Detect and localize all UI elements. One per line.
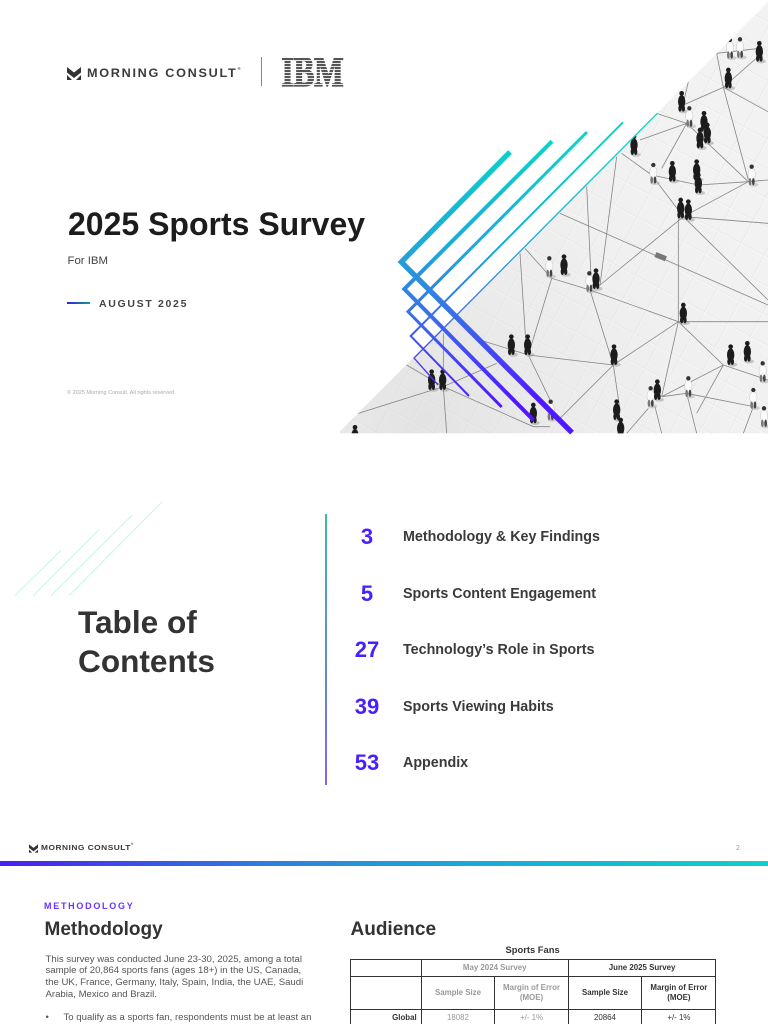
methodology text: To qualify as a sports fan, respondents must be at least an — [64, 1012, 311, 1023]
page number: 53 — [355, 750, 379, 775]
contents row 1 — [361, 524, 600, 549]
wordmark: MORNING CONSULT® — [41, 842, 133, 852]
table of contents slide — [14, 502, 600, 785]
panel: audience — [350, 918, 560, 955]
contents row 4 — [355, 694, 554, 718]
logo: Morning Consult — [67, 66, 241, 80]
page number: 5 — [361, 580, 373, 606]
date: AUGUST 2025 — [99, 298, 188, 310]
methodology text — [46, 954, 311, 1023]
heading: Contents — [78, 643, 215, 679]
subtitle: For IBM — [68, 254, 108, 266]
audience table: +/- 1% — [667, 1013, 690, 1022]
section name: Technology’s Role in Sports — [403, 642, 594, 658]
heading: Table of — [78, 604, 197, 640]
methodology text: sample of 20,864 sports fans (ages 18+) in the US, Canada, — [46, 965, 301, 976]
heading: Audience — [350, 918, 436, 940]
gradient bar — [0, 860, 768, 866]
contents row 5 — [355, 750, 468, 775]
page number: 2 — [736, 844, 740, 852]
date accent line — [67, 302, 90, 304]
audience table: (MOE) — [520, 993, 543, 1002]
decorative diagonal lines — [14, 502, 162, 596]
drain — [654, 252, 667, 261]
section name: Sports Content Engagement — [403, 586, 596, 602]
audience table: Sample Size — [435, 988, 481, 997]
page number: 3 — [361, 524, 373, 549]
heading: Methodology — [44, 918, 163, 940]
contents row 3 — [355, 637, 594, 662]
audience table: May 2024 Survey — [463, 963, 526, 972]
table title: Sports Fans — [506, 944, 560, 955]
section name: Sports Viewing Habits — [403, 698, 554, 714]
methodology text: This survey was conducted June 23-30, 2025, among a total — [46, 954, 302, 965]
page number: 39 — [355, 694, 379, 718]
methodology text: the UK, France, Germany, Italy, Spain, India, the UAE, Saudi — [46, 977, 303, 988]
section name: Methodology & Key Findings — [403, 529, 600, 545]
audience table: Global — [392, 1013, 417, 1022]
photo with network lines and teal-to-purple chevrons — [340, 2, 768, 434]
audience table: Margin of Error — [503, 983, 560, 992]
panel: methodology — [44, 900, 163, 940]
icon: Morning Consult mark — [29, 844, 38, 853]
section name: Appendix — [403, 755, 468, 771]
page number: 27 — [355, 637, 379, 662]
vertical gradient rule — [325, 514, 327, 785]
methodology text: Arabia, Mexico and Brazil. — [46, 989, 157, 1000]
heading — [78, 604, 215, 679]
network lines — [358, 48, 768, 433]
contents row 2 — [361, 580, 596, 606]
title: 2025 Sports Survey — [68, 206, 365, 242]
copyright: © 2025 Morning Consult. All rights reserved. — [67, 390, 176, 396]
divider between logos — [261, 57, 262, 86]
audience table: 20864 — [594, 1013, 616, 1022]
audience table: June 2025 Survey — [609, 963, 675, 972]
section tag: METHODOLOGY — [44, 900, 134, 910]
audience table — [350, 959, 716, 1024]
methodology text: • — [46, 1012, 49, 1023]
audience table: Sample Size — [582, 988, 628, 997]
chevrons — [401, 113, 657, 433]
audience table: (MOE) — [667, 993, 690, 1002]
cover slide — [67, 2, 768, 434]
audience table: +/- 1% — [520, 1013, 543, 1022]
audience table: 18082 — [447, 1013, 469, 1022]
people — [351, 37, 768, 447]
methodology slide header — [0, 842, 768, 866]
wordmark: MORNING CONSULT® — [87, 66, 241, 80]
icon: Morning Consult mark — [67, 67, 81, 80]
audience table: Margin of Error — [650, 983, 707, 992]
